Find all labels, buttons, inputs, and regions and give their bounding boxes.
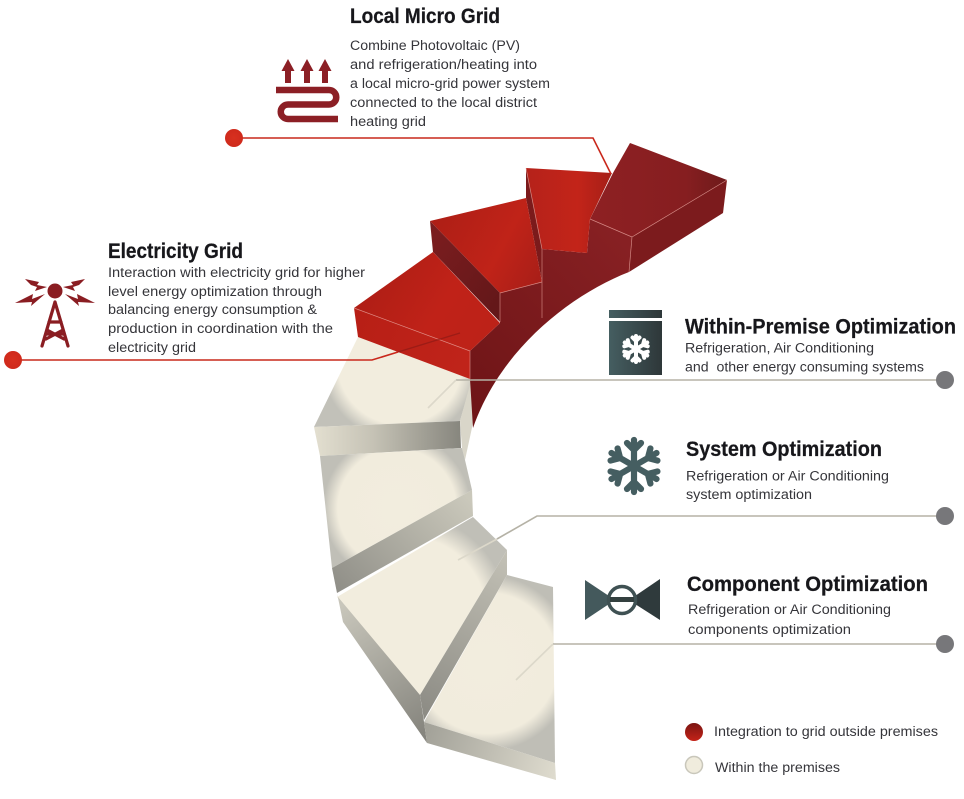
legend item: within the premises: Within the premises [715,760,840,776]
description: local micro grid: a local micro-grid power system [350,76,550,92]
step: component top face [337,517,507,695]
description: within-premise optimization: Refrigeration, Air Conditioning [685,340,874,356]
second step left wall [526,168,542,282]
legend item: integration to grid outside premises: Integration to grid outside premises [714,724,938,740]
legend [685,723,938,776]
text: local micro grid [350,5,550,130]
leader line: electricity grid [4,333,460,369]
heading: electricity grid: Electricity Grid [108,240,243,263]
leader line: component optimization [516,635,954,680]
heading: within-premise optimization: Within-Premise Optimization [685,316,956,338]
leader line: within-premise optimization [428,371,954,408]
top step top face [590,143,727,237]
description: local micro grid: and refrigeration/heating into [350,57,537,73]
staircase: integration to grid (red steps) [354,143,727,428]
text: system optimization [686,438,889,503]
step: component front face [420,550,507,720]
description: local micro grid: connected to the local district [350,95,537,111]
description: electricity grid: production in coordination with the [108,321,333,337]
step: component left face [337,593,427,743]
description: electricity grid [108,265,365,356]
icon: radio tower [15,279,95,346]
step: system top face [320,448,472,568]
icon: refrigerated cabinet [609,310,662,375]
description: within-premise optimization [685,340,924,376]
description: electricity grid: electricity grid [108,340,196,356]
staircase: within the premises (beige steps) [314,337,556,780]
description: system optimization [686,468,889,503]
description: local micro grid [350,38,550,130]
leader line: local micro grid [225,129,611,174]
dark arch wall [470,219,632,428]
third step left wall [430,221,500,322]
step: within-premise right face [460,381,473,460]
description: electricity grid: Interaction with electricity grid for higher [108,265,365,281]
description: electricity grid: balancing energy consumption & [108,302,318,318]
fourth step front face [354,308,470,379]
step: system front face [332,490,473,593]
description: component optimization [688,602,891,638]
heading: system optimization: System Optimization [686,438,882,461]
icon: valve [585,579,660,620]
step: bottom top face [424,575,555,763]
step: within-premise front face [314,421,461,456]
text: component optimization [687,573,928,638]
description: local micro grid: Combine Photovoltaic (PV) [350,38,520,54]
text: electricity grid [108,240,365,356]
description: component optimization: components optimization [688,622,851,638]
heading: local micro grid: Local Micro Grid [350,5,500,28]
second step top face [526,168,612,253]
description: system optimization: Refrigeration or Air Conditioning [686,468,889,484]
description: local micro grid: heating grid [350,114,426,130]
icon: snowflake [608,440,660,492]
step: bottom front face [424,722,556,780]
top step right face [629,180,727,272]
icon: heat arrows and coil [276,59,338,119]
fourth step top face [354,252,500,351]
description: within-premise optimization: and other energy consuming systems [685,360,924,376]
step: within-premise top face [314,337,471,427]
leader line: system optimization [458,507,954,560]
text: within-premise optimization [685,316,956,376]
third step top face [430,198,542,293]
description: electricity grid: level energy optimization through [108,284,322,300]
heading: component optimization: Component Optimization [687,573,928,596]
description: system optimization: system optimization [686,487,812,503]
description: component optimization: Refrigeration or Air Conditioning [688,602,891,618]
legend item: within the premises [686,756,840,776]
